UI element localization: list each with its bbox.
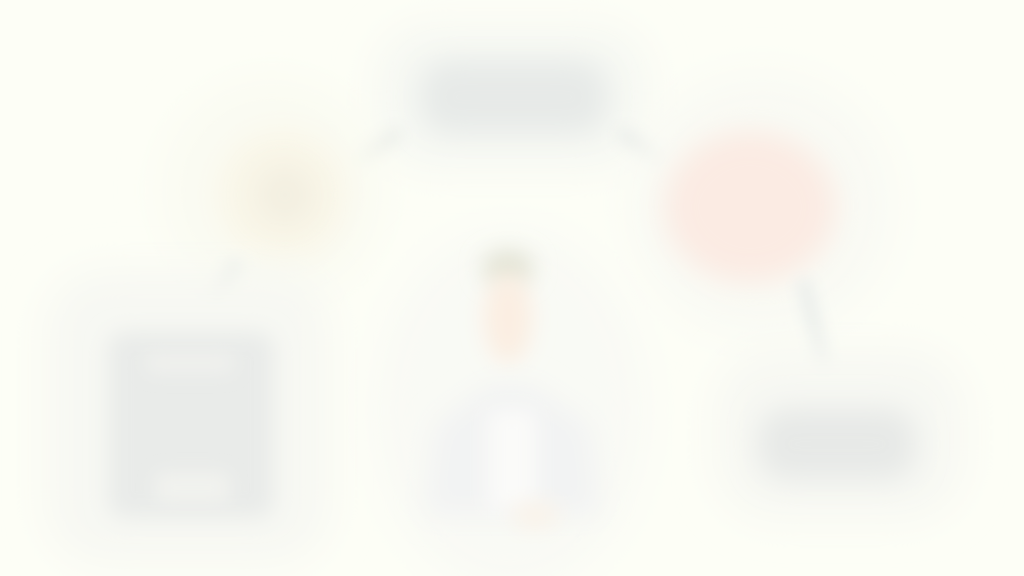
panel: right box — [715, 350, 965, 520]
panel: top box — [375, 25, 650, 170]
arrow: left circle to left panel — [208, 262, 238, 315]
arrow: right circle to right panel — [803, 280, 825, 368]
panel: left box — [45, 270, 330, 565]
icon: left circle — [160, 78, 384, 302]
arrow: top box to left circle — [345, 132, 400, 168]
arrow: top box to right circle — [620, 132, 675, 168]
icon: central person — [370, 225, 650, 576]
icon: right circle — [627, 70, 897, 340]
